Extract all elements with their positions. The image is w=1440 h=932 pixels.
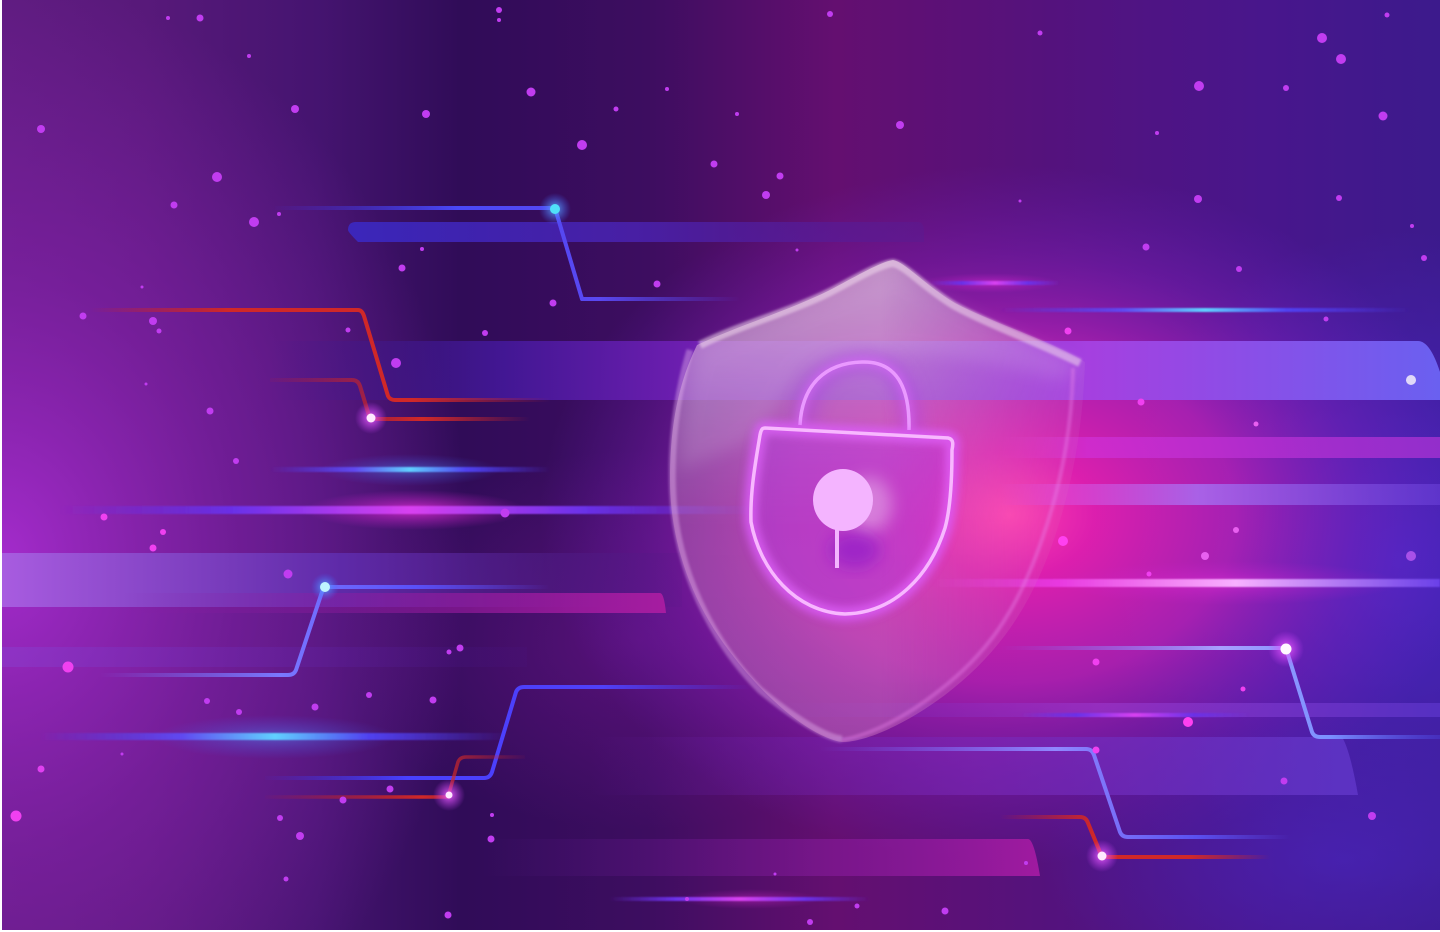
shield (670, 260, 1085, 742)
padlock body outline (751, 428, 953, 614)
keyhole shadow (844, 477, 892, 533)
circuit line: lower right (820, 749, 1290, 872)
circuit line: right (1000, 631, 1440, 737)
shield body (670, 260, 1085, 742)
shackle (800, 362, 909, 430)
circuit line: left blue (100, 573, 550, 675)
white dot on main band (1406, 375, 1416, 385)
glow streaks (40, 273, 1440, 909)
circuit line: upper left red (90, 310, 550, 434)
padlock inner glow (752, 430, 952, 616)
padlock (751, 362, 953, 616)
circuit line: lower center (265, 687, 750, 811)
translucent speed bands (2, 222, 1440, 876)
shield rim highlight (700, 263, 1080, 363)
padlock body outline glow (751, 428, 953, 614)
keyhole (813, 469, 873, 531)
circuit line: top blue (275, 193, 740, 299)
